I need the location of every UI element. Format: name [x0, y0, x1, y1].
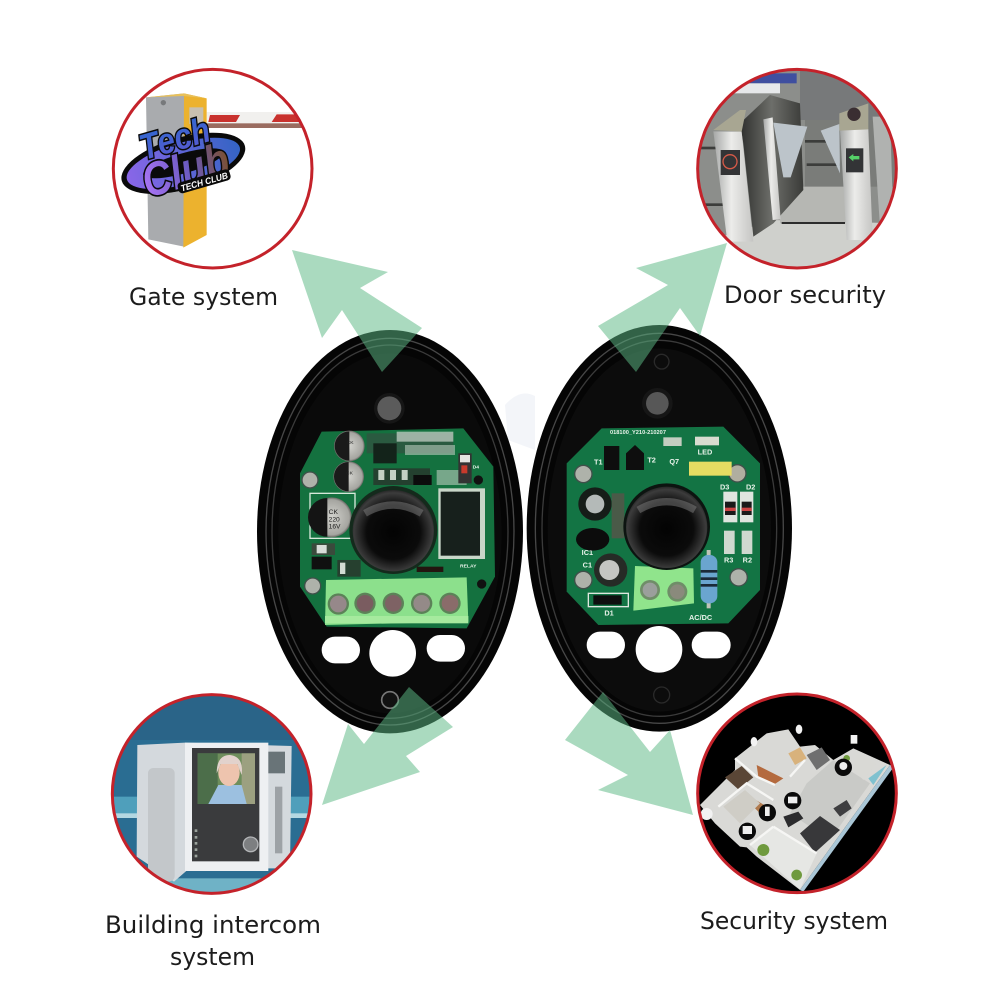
capacitor 220: 220	[329, 516, 340, 523]
resistor	[701, 550, 717, 608]
intercom body	[137, 743, 292, 882]
relay	[438, 488, 485, 559]
barrier cabinet	[146, 93, 207, 248]
housing	[257, 330, 523, 733]
diodes and resistors	[723, 492, 753, 554]
capacitors	[576, 487, 627, 587]
circuit board: LED	[698, 447, 712, 456]
label: building intercom system: Building intercom	[105, 911, 321, 939]
label: gate system: Gate system	[129, 283, 278, 311]
arrow: to gate system	[292, 250, 422, 372]
terminal block	[633, 566, 694, 611]
label: security system: Security system	[700, 907, 888, 935]
label: building intercom system	[105, 911, 321, 971]
left gate pillar	[713, 95, 807, 242]
capacitor 220: 16V	[329, 524, 341, 531]
arrows	[292, 243, 727, 815]
capacitor 220: CK	[329, 509, 338, 516]
circuit board: C1	[583, 560, 592, 569]
circle: security system	[696, 692, 898, 894]
circle: door security	[696, 68, 898, 270]
circuit board	[300, 428, 495, 628]
circuit board: RELAY	[460, 563, 477, 569]
floor plan	[700, 729, 894, 892]
transistors	[604, 445, 644, 470]
red ring	[698, 694, 896, 893]
logo: Tech	[134, 109, 215, 168]
circuit board: AC/DC	[689, 613, 713, 622]
capacitor 220	[308, 497, 352, 537]
left sensor: relay output unit	[257, 330, 523, 733]
circuit board: R2	[743, 556, 752, 565]
faint background ghost shape	[505, 393, 535, 450]
right sensor: AC/DC unit	[527, 325, 792, 732]
capacitor C8: CK	[346, 471, 354, 477]
circuit board: IC1	[582, 548, 593, 557]
mounting holes	[322, 630, 465, 677]
red ring	[113, 69, 312, 268]
circuit board: T1	[594, 458, 603, 467]
label: building intercom system: system	[170, 943, 255, 971]
logo	[121, 116, 246, 197]
arrow: to building intercom	[322, 687, 453, 805]
red ring	[112, 695, 311, 893]
circuit board: D3	[720, 482, 729, 491]
silkscreen text: 018100_Y210-210207	[610, 430, 666, 436]
barrier arm	[206, 112, 302, 128]
PIR dome	[349, 486, 437, 574]
circle: building intercom	[110, 693, 312, 895]
device markers	[701, 725, 857, 840]
logo: Club	[136, 133, 235, 208]
arrow: to security system	[565, 692, 693, 815]
capacitor C7	[334, 431, 365, 461]
capacitor C8	[333, 461, 364, 492]
circle: gate system	[112, 68, 314, 270]
keypad dots	[195, 829, 197, 857]
label: door security: Door security	[724, 281, 886, 309]
red ring	[698, 69, 896, 268]
PIR dome	[623, 483, 710, 570]
arrow: to door security	[598, 243, 727, 372]
video screen	[198, 753, 255, 804]
circuit board: D1	[604, 609, 614, 618]
circuit board: Q7	[669, 457, 679, 466]
logo: TECH CLUB	[180, 170, 230, 193]
circuit board	[567, 427, 760, 625]
circuit board: T2	[647, 456, 656, 465]
circuit board: D2	[746, 482, 755, 491]
right gate pillar	[821, 103, 893, 240]
terminal block	[325, 577, 468, 625]
circuit board: R3	[724, 556, 733, 565]
mounting holes	[587, 626, 731, 673]
circuit board: D4	[473, 464, 479, 470]
housing	[527, 325, 792, 732]
capacitor C7: CK	[347, 440, 354, 446]
yellow capacitor	[689, 462, 732, 476]
